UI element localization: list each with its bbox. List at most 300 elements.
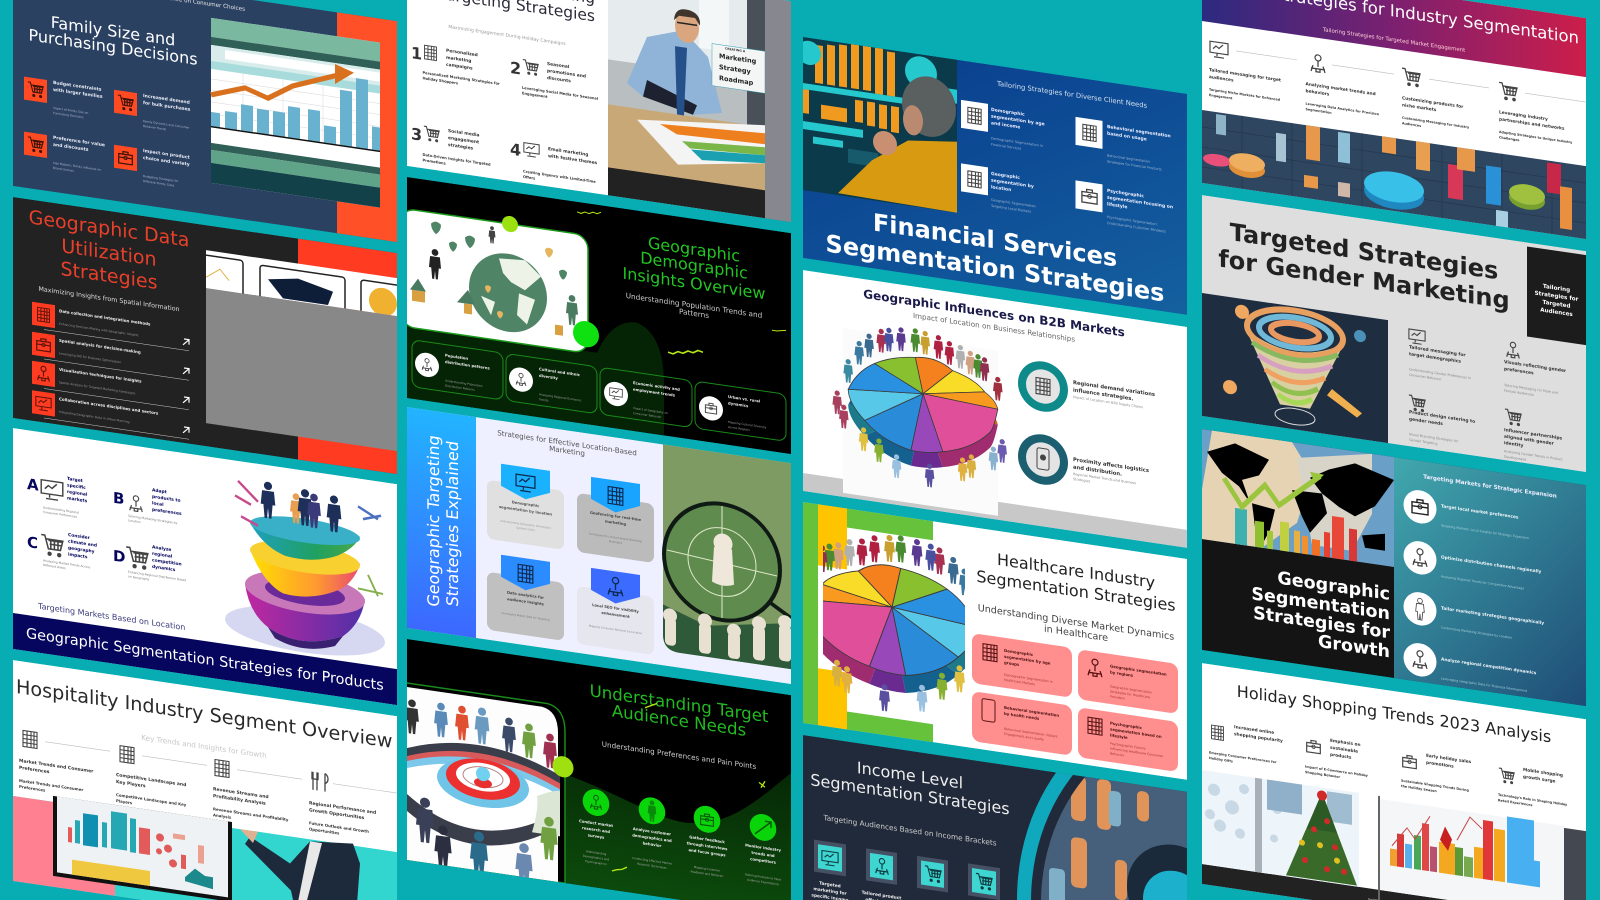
- roadmap label: Marketing: [719, 52, 756, 65]
- item 3: [412, 126, 490, 166]
- card: data analytics: [487, 553, 564, 641]
- row: data collection: Enhancing Decision-Making with Geographic Insights: [59, 322, 139, 337]
- panel: holiday shopping trends 2023: [1202, 663, 1586, 900]
- item: product design: Visual Branding Strategies for: [1409, 432, 1458, 443]
- title: Purchasing Decisions: [28, 25, 198, 69]
- column: regional performance: Growth Opportunities: [309, 807, 365, 821]
- item 3: engagement: [448, 135, 479, 146]
- column: market trends: Leveraging Data Analytics for Precision: [1306, 102, 1379, 116]
- column: revenue streams: Profitability Analysis: [213, 793, 266, 807]
- step: pricing: [968, 863, 1000, 900]
- item: psychographic: Psychographic Segmentation:: [1107, 215, 1158, 226]
- item: value and discounts: Preference for value: [53, 136, 105, 148]
- item B: local: [152, 500, 164, 508]
- photo: analyst and screens: [797, 36, 957, 213]
- roadmap label: Strategy: [719, 63, 752, 76]
- card: economic: Impact of Geography on: [633, 406, 668, 415]
- item: geographic: [961, 163, 1037, 215]
- card: age groups: Healthcare Markets: [1004, 678, 1035, 686]
- item 1: 1: [411, 43, 422, 64]
- column: market trends: Market Trends and Consumer: [19, 778, 83, 792]
- row: collaboration: [32, 390, 189, 439]
- card: geofencing: Strategies: [609, 540, 623, 545]
- card: population: Distribution Patterns: [445, 384, 475, 392]
- item: geographic: location: [991, 184, 1011, 193]
- row: tailor marketing: [1404, 590, 1544, 644]
- title: Demographic: [640, 248, 748, 283]
- item: early sales: Sustainable Shopping Trends During: [1401, 779, 1469, 792]
- card: local seo: Mapping Consumer Behavior by Location: [589, 625, 643, 635]
- pie with people image: [797, 520, 995, 727]
- panel: geographic influences on b2b: [803, 270, 1187, 548]
- item: early sales: [1401, 749, 1472, 798]
- card: population: Population: [445, 353, 468, 361]
- item: product design: [1409, 395, 1475, 451]
- photo: bar chart: [1378, 796, 1586, 900]
- card: population: Understanding Population: [445, 379, 482, 388]
- panel: geographic demographic insights: [401, 176, 791, 454]
- row: collaboration: Collaboration across disciplines and sectors: [59, 396, 159, 416]
- item: demographic: [961, 100, 1045, 154]
- item 2: discounts: [547, 75, 571, 84]
- title: Segmentation Strategies: [826, 229, 1164, 307]
- step: surveys: Understanding: [586, 849, 606, 856]
- item C: Different Areas: [43, 563, 66, 570]
- card: cultural: Trends: [538, 397, 549, 403]
- item D: regional: [152, 551, 173, 560]
- item: influencer: identity: [1504, 440, 1523, 449]
- item: budget constraints: Budget constraints: [53, 81, 101, 93]
- card: age groups: segmentation by age: [1004, 654, 1051, 666]
- step: feedback: Gather feedback: [689, 834, 725, 844]
- column: customizing products: Customizing Messaging for Industry: [1402, 116, 1469, 130]
- item: behavioral: Behavioral segmentation: [1107, 125, 1171, 139]
- item 2: Leveraging Social Media for Seasonal: [522, 86, 598, 101]
- item C: geography: [68, 545, 95, 555]
- item: behavioral: Strategies for Financial Products: [1107, 159, 1162, 172]
- black tag box: [1527, 246, 1586, 345]
- item 4: Offers: [523, 175, 535, 181]
- card: lifestyle: Psychographic Factors: [1110, 741, 1146, 751]
- item: geographic: Geographic: [991, 172, 1020, 181]
- step: trends: Tailoring Products to Meet: [745, 872, 781, 882]
- item D: dynamics: [152, 564, 176, 573]
- title: Segmentation Strategies: [810, 770, 1010, 819]
- callout: proximity: and distribution.: [1073, 464, 1122, 478]
- step: demographics: demographics and: [632, 832, 672, 843]
- panel: family size and purchasing decisions: [13, 0, 397, 242]
- green backdrop: [407, 289, 664, 436]
- title: Strategies: [60, 258, 158, 294]
- item C: Consider: [68, 533, 90, 541]
- subtitle: Patterns: [679, 307, 709, 320]
- item: product design: gender needs: [1409, 416, 1443, 427]
- item: sustainable: [1305, 734, 1369, 783]
- item: influencer: [1504, 409, 1563, 467]
- item: sustainable: Emphasis on: [1330, 739, 1361, 748]
- 3d chart photo: [1202, 110, 1586, 239]
- step: surveys: Psychographics: [585, 859, 607, 866]
- item: bulk purchases: Behavior Trends: [143, 124, 167, 131]
- item: visuals: [1503, 341, 1567, 402]
- item: geographic: segmentation by: [991, 178, 1034, 190]
- stacked funnel illustration: [225, 476, 385, 664]
- item: psychographic: Psychographic: [1107, 189, 1144, 199]
- item 1: campaigns: [446, 62, 473, 72]
- column: partnerships: Leveraging industry: [1499, 110, 1548, 122]
- step: trends: Monitor industry: [745, 842, 781, 853]
- item: psychographic: [1076, 180, 1173, 235]
- item: product choice: choice and variety: [143, 155, 190, 168]
- card: data analytics: Data analytics for: [507, 591, 544, 600]
- subtitle: Impact of Location on Business Relationships: [913, 311, 1075, 344]
- item: product choice: Impact on product: [143, 149, 190, 161]
- photo: snowy christmas tree: [1202, 770, 1359, 887]
- title: Segmentation Strategies: [976, 567, 1176, 615]
- item: behavioral: [1076, 117, 1171, 173]
- item 1: [412, 44, 500, 85]
- item: online shopping: Holiday Gifts: [1209, 756, 1233, 764]
- card: lifestyle: segmentation based on: [1110, 726, 1162, 739]
- item: bulk purchases: [114, 90, 190, 130]
- item 2: promotions and: [547, 68, 586, 80]
- step: demographics: Research Techniques: [637, 862, 667, 870]
- panel: holiday marketing targeting strategies: [407, 0, 792, 222]
- row: spatial analysis: [32, 332, 189, 380]
- panel: geographic data utilization: [13, 197, 411, 476]
- column: customizing products: niche markets: [1402, 102, 1437, 113]
- step: surveys: research and: [582, 825, 610, 834]
- title band: Geographic Segmentation Strategies for Products: [26, 626, 384, 694]
- panel: geographic segmentation for products: [13, 428, 397, 705]
- green wave: [565, 740, 791, 900]
- item: visuals: Female Audiences: [1504, 389, 1534, 397]
- subtitle: Understanding Preferences and Pain Points: [602, 739, 756, 771]
- item 4: Email marketing: [548, 147, 588, 158]
- card: lifestyle: Behavior: [1110, 751, 1125, 758]
- title: [30, 210, 188, 289]
- item: early sales: the Holiday Season: [1401, 784, 1437, 793]
- card: local seo: Local SEO for visibility: [592, 603, 639, 614]
- card: population: [412, 340, 503, 400]
- title: Strategies for: [1253, 603, 1390, 643]
- column: competitive landscape: Competitive Landscape and Key: [116, 792, 186, 807]
- vertical title block: Geographic Targeting: [424, 434, 443, 608]
- item: sustainable: sustainable: [1330, 745, 1358, 755]
- item: mobile shopping: Retail Experiences: [1498, 798, 1532, 807]
- title: Financial Services: [873, 208, 1117, 272]
- item 1: marketing: [446, 55, 471, 64]
- item: online shopping: shopping popularity: [1234, 731, 1283, 744]
- photo: man with roadmap: [608, 0, 791, 222]
- item: influencer: Analyzing Gender Trends in Product: [1504, 449, 1563, 462]
- step: feedback: Mapping Customer: [694, 865, 720, 873]
- card: lifestyle: lifestyle: [1110, 732, 1128, 740]
- title: Audience Needs: [612, 701, 746, 740]
- step: surveys: [579, 787, 613, 867]
- photo: monitor and presenter: [13, 790, 397, 900]
- callout: regional demand: [1018, 358, 1155, 428]
- callout: regional demand: Regional demand variations: [1073, 380, 1155, 398]
- panel: targeted strategies for gender marketing: [1202, 195, 1586, 472]
- card: urban rural: dynamics: [728, 400, 749, 408]
- row: visualization: [32, 361, 189, 410]
- card: health needs: Behavioral segmentation: [1004, 705, 1059, 718]
- column: customizing products: Audiences: [1402, 121, 1421, 128]
- card: geofencing: [577, 475, 654, 563]
- card: economic: Consumer Behavior: [633, 411, 662, 419]
- title: Targeted Strategies: [1230, 218, 1498, 285]
- target illustration: [402, 682, 565, 892]
- row: competition: Leveraging Geographic Data for Business Development: [1441, 676, 1528, 693]
- step: feedback: Feedback and Behavior: [691, 869, 724, 878]
- item B: B: [113, 489, 124, 508]
- magnifier photo: [663, 444, 792, 669]
- item C: impacts: [68, 552, 88, 560]
- item: product choice: Budgeting Strategies for: [143, 174, 178, 183]
- vertical title block: Strategies Explained: [443, 440, 462, 608]
- step: targeted marketing: [811, 839, 849, 900]
- step: surveys: Demographics and: [583, 854, 609, 862]
- subtitle: Targeting Audiences Based on Income Brackets: [822, 813, 997, 848]
- item: demographic: segmentation by age: [991, 114, 1045, 127]
- card: demographic: [487, 462, 564, 550]
- item 4: with festive themes: [548, 153, 598, 166]
- row: local preferences: Targeting Markets: Local Insights for Strategic Expansion: [1440, 523, 1529, 540]
- step: targeted marketing: marketing for: [813, 886, 847, 897]
- card: local seo: enhancement: [601, 611, 630, 619]
- card: demographic: Demographic: [512, 500, 539, 508]
- item B: products to: [152, 494, 181, 504]
- item 3: Social media: [448, 129, 479, 139]
- item D: Analyze: [152, 545, 171, 553]
- step: trends: Audience Expectations: [747, 878, 780, 886]
- column: customizing products: Customizing products for: [1402, 96, 1463, 110]
- item: mobile shopping: Technology's Role in Shaping Holiday: [1498, 793, 1567, 807]
- title: Growth: [1318, 632, 1390, 662]
- title: Family Size and: [51, 13, 175, 50]
- decorative dots: [502, 215, 599, 349]
- vertical title block: [407, 407, 476, 638]
- column: regional performance: Future Outlook and Growth: [309, 820, 369, 834]
- item: online shopping: [1209, 721, 1283, 771]
- row: competition: Analyze regional competition dynamics: [1441, 656, 1537, 676]
- item: visuals: Tailoring Messaging for Male and: [1504, 383, 1558, 395]
- subtitle: Targeting Markets Based on Location: [37, 602, 185, 632]
- step: demographics: Conducting Effective Market: [632, 856, 672, 866]
- item B: [114, 488, 182, 524]
- column: regional performance: Opportunities: [309, 826, 340, 836]
- item: visuals: Visuals reflecting gender: [1504, 360, 1566, 374]
- heading: Marketing: [549, 444, 585, 458]
- item 1: Personalized: [446, 49, 478, 58]
- row: local preferences: [1404, 488, 1529, 540]
- title: Healthcare Industry: [997, 550, 1155, 592]
- callout: regional demand: Impact of Location on B2B Supply Chains: [1073, 395, 1143, 409]
- row: distribution: Analyzing Regional Trends for Competitive Advantage: [1441, 574, 1524, 591]
- row: spatial analysis: Spatial analysis for decision-making: [59, 338, 141, 355]
- row: spatial analysis: Leveraging GIS for Business Optimization: [59, 351, 121, 364]
- item B: preferences: [152, 507, 182, 517]
- item C: C: [27, 533, 38, 553]
- card: health needs: by health needs: [1004, 711, 1040, 721]
- colour blocks: [803, 502, 933, 742]
- item: early sales: Early holiday sales: [1426, 754, 1471, 765]
- step: targeted marketing: Targeted: [819, 881, 841, 890]
- row: distribution: Optimize distribution channels regionally: [1441, 554, 1542, 575]
- card: economic: employment trends: [633, 386, 676, 398]
- card: regions: Providers: [1110, 694, 1125, 701]
- item: value and discounts: and discounts: [53, 142, 89, 153]
- card: regions: [1078, 649, 1178, 714]
- item 4: 4: [510, 140, 521, 160]
- step: feedback: and focus groups: [689, 847, 726, 858]
- item: messaging: [1409, 329, 1471, 386]
- row: collaboration: Integrating Geographic Data in Urban Planning: [59, 410, 130, 424]
- panel: income level segmentation: [803, 622, 1509, 900]
- black tag box: Strategies for: [1535, 290, 1579, 303]
- item: influencer: Development: [1504, 455, 1527, 462]
- column: revenue streams: [213, 758, 302, 822]
- heading: Targeting Markets for Strategic Expansion: [1423, 473, 1557, 500]
- image with icon frames: [206, 250, 397, 452]
- item 2: Engagement: [522, 91, 548, 99]
- item C: climate and: [68, 539, 97, 549]
- row: data collection: Data collection and integration methods: [59, 308, 151, 327]
- item: sustainable: Shopping Behavior: [1305, 770, 1341, 779]
- item 3: Promotions: [422, 158, 446, 166]
- step: feedback: [687, 803, 728, 879]
- title: for Gender Marketing: [1218, 244, 1510, 315]
- column: market trends: behaviors: [1306, 88, 1330, 98]
- card: economic: Economic activity and: [633, 380, 680, 392]
- item: budget constraints: [24, 76, 102, 118]
- card: regions: by regions: [1110, 669, 1134, 678]
- card: geofencing: marketing: [605, 519, 627, 527]
- item C: Analyzing Market Trends Across: [43, 558, 90, 569]
- subtitle: Understanding Population Trends and: [626, 291, 762, 320]
- item: online shopping: Emerging Consumer Preferences for: [1209, 751, 1276, 764]
- item: behavioral: Behavioral Segmentation: [1107, 153, 1150, 164]
- item: behavioral: based on usage: [1107, 131, 1147, 143]
- title: Geographic: [1277, 569, 1390, 605]
- panel: strategies for industry segmentation: [1202, 0, 1586, 239]
- funnel image: [1202, 293, 1388, 443]
- item: product choice: [114, 144, 190, 190]
- column: tailored messaging: Tailored messaging for target: [1209, 68, 1281, 84]
- item D: [114, 545, 186, 582]
- card: urban rural: Urban vs. rural: [728, 394, 760, 404]
- column: competitive landscape: [116, 745, 207, 807]
- panel: hospitality industry segment overview: [13, 660, 397, 900]
- callout: proximity: Strategies: [1073, 477, 1091, 484]
- item: value and discounts: Brand Choices: [53, 166, 74, 173]
- card: age groups: [972, 633, 1072, 698]
- column: tailored messaging: [1209, 41, 1297, 110]
- column: revenue streams: Analysis: [213, 812, 232, 820]
- row: tailor marketing: Tailor marketing strategies geographically: [1441, 605, 1544, 626]
- callout: proximity: Proximity affects logistics: [1073, 457, 1149, 474]
- roadmap label: CREATING A: [725, 46, 746, 53]
- item B: Tailoring Marketing Strategies by: [128, 514, 177, 525]
- title: Segmentation: [1251, 584, 1390, 624]
- title: [623, 229, 765, 303]
- title: Utilization: [61, 235, 157, 271]
- step: surveys: Conduct market: [579, 818, 613, 828]
- card: geofencing: Techniques for Location-Based Marketing: [589, 533, 642, 543]
- zigzag accents: [577, 209, 786, 370]
- item: influencer: Influencer partnerships: [1504, 428, 1562, 442]
- column: market trends: Market Trends and Consumer: [19, 759, 93, 775]
- heading: Strategies for Effective Location-Based: [497, 428, 637, 458]
- step: demographics: [632, 795, 673, 871]
- heading: Tailoring Strategies for Diverse Client Needs: [996, 80, 1148, 110]
- callout: regional demand: influence strategies.: [1073, 387, 1133, 402]
- item: messaging: Tailored messaging for: [1409, 345, 1466, 358]
- step: trends: trends and: [751, 850, 775, 858]
- circular photo: [1017, 654, 1509, 900]
- item D: Enhancing Regional Distribution Based: [128, 570, 186, 582]
- item: online shopping: Increased online: [1234, 725, 1274, 736]
- item: bulk purchases: Family Dynamics and Consumer: [143, 119, 190, 130]
- pie with people image: [832, 316, 1007, 517]
- item A: markets: [67, 495, 88, 504]
- item: product design: Gender Targeting: [1409, 438, 1438, 446]
- item: mobile shopping: Mobile shopping: [1523, 768, 1563, 779]
- row: tailor marketing: Customizing Marketing Strategies by Location: [1441, 625, 1512, 640]
- title: Income Level: [857, 758, 963, 793]
- column: competitive landscape: Competitive Landscape and: [116, 773, 186, 788]
- step: tailored offerings: [862, 848, 901, 900]
- column: partnerships: [1499, 82, 1586, 152]
- panel: understanding target audience: [402, 638, 791, 900]
- zigzag accents: [612, 697, 765, 893]
- card: cultural: Analyzing Regional Economic: [539, 392, 581, 402]
- item: sustainable: products: [1330, 752, 1352, 761]
- row: local preferences: Target local market preferences: [1441, 503, 1519, 521]
- card: health needs: Behavioral Segmentation: Patient: [1004, 727, 1058, 739]
- item: bulk purchases: for bulk purchases: [143, 100, 191, 113]
- step: feedback: through interviews: [687, 840, 728, 851]
- item: demographic: and income: [991, 120, 1020, 131]
- footer band: [1202, 864, 1586, 900]
- column: tailored messaging: Engagement: [1209, 93, 1233, 100]
- item: value and discounts: [24, 132, 105, 172]
- black tag box: Audiences: [1540, 306, 1573, 318]
- column: market trends: Preferences: [19, 784, 46, 793]
- lime dot: [552, 755, 574, 779]
- card: regions: Strategies for Healthcare: [1110, 689, 1150, 699]
- card: regions: Geographic segmentation: [1110, 663, 1167, 677]
- column: market trends: [19, 730, 110, 792]
- item D: on Geography: [128, 574, 149, 581]
- step: trends: [744, 811, 782, 887]
- title: [1251, 565, 1390, 662]
- item B: Adapt: [152, 488, 167, 495]
- callout: proximity: [1018, 431, 1149, 500]
- item: influencer: aligned with gender: [1504, 434, 1555, 447]
- item: demographic: Financial Services: [991, 142, 1021, 151]
- item C: [28, 533, 97, 570]
- item 3: Data-Driven Insights for Targeted: [422, 153, 491, 167]
- card: data analytics: Leveraging Mobile Data for Targeting: [501, 612, 550, 622]
- column: tailored messaging: Targeting Niche Markets for Enhanced: [1209, 88, 1280, 102]
- title: Holiday Shopping Trends 2023 Analysis: [1237, 682, 1551, 746]
- header band: [1202, 0, 1586, 77]
- item 1: Personalized Marketing Strategies for: [422, 71, 500, 86]
- item A: specific: [67, 482, 86, 491]
- panel: geographic targeting explained: [407, 407, 792, 684]
